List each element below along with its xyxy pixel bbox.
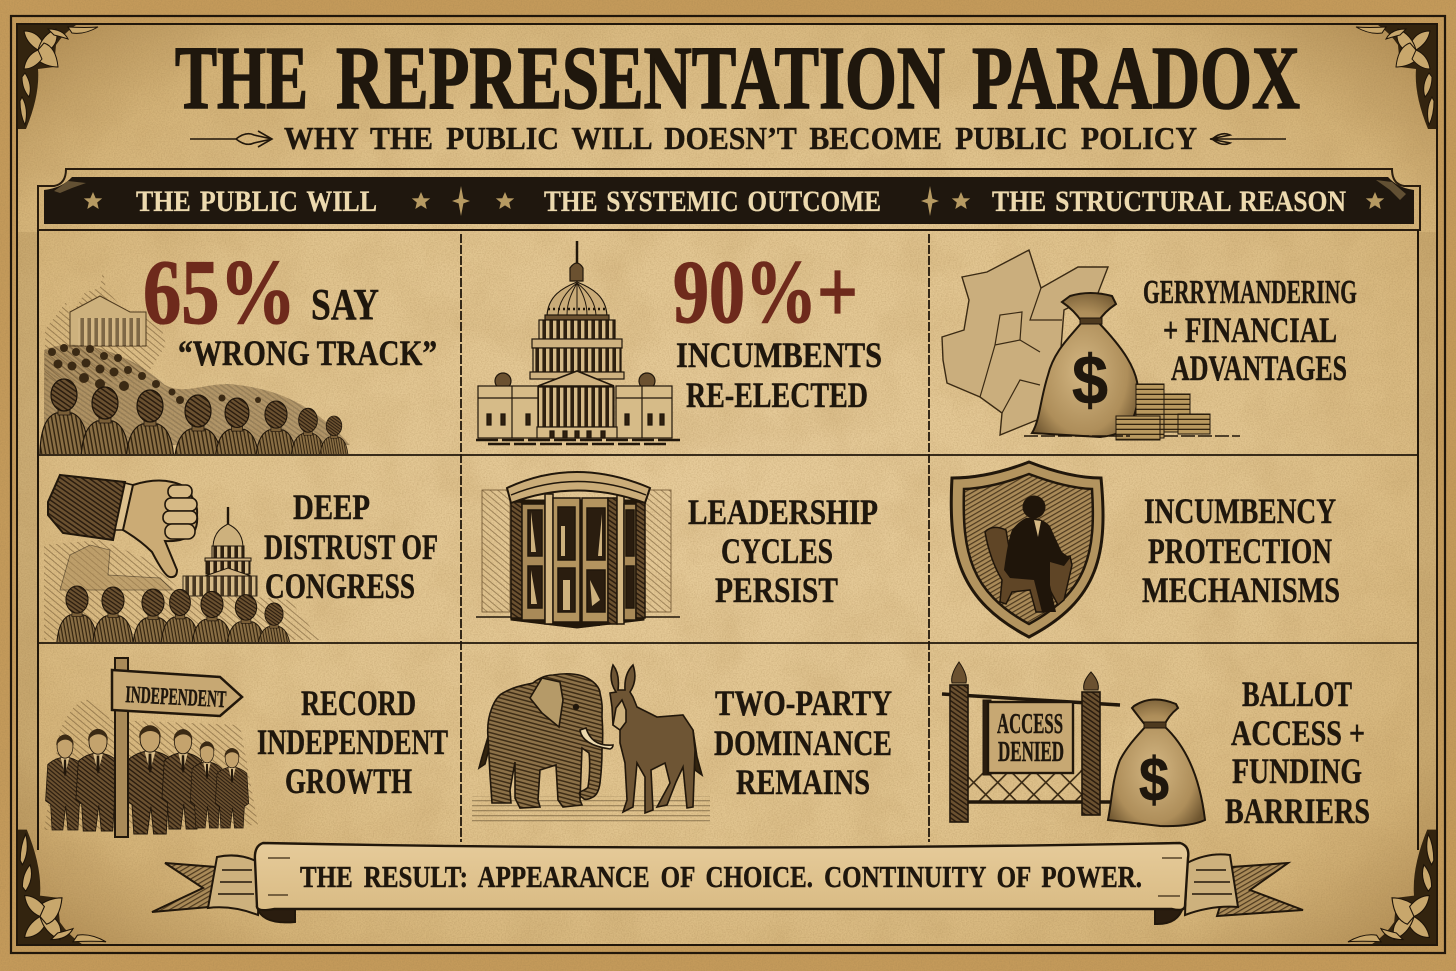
- label: two-party dominance remains: TWO-PARTY: [715, 683, 892, 723]
- label: deep distrust of congress: CONGRESS: [265, 566, 415, 606]
- label: incumbents re-elected: INCUMBENTS: [676, 335, 882, 375]
- label: wrong track: “WRONG TRACK”: [178, 333, 437, 373]
- result text: THE RESULT: APPEARANCE OF CHOICE. CONTINUITY OF POWER.: [300, 859, 1142, 894]
- label: record independent growth: [257, 683, 448, 801]
- illustration: crowd and building: [39, 275, 350, 454]
- label: deep distrust of congress: DISTRUST OF: [264, 527, 438, 567]
- illustration: independent signpost with people: [44, 658, 258, 837]
- label: ballot access + funding barriers: BARRIERS: [1225, 791, 1370, 831]
- sign text: [997, 709, 1064, 768]
- illustration: money bag: $: [1139, 746, 1169, 815]
- illustration: district map: [942, 250, 1108, 435]
- illustration: revolving door: [476, 472, 680, 628]
- illustration: money bag and coins: $: [1072, 341, 1108, 419]
- label: two-party dominance remains: REMAINS: [736, 762, 870, 802]
- label: gerrymandering + financial advantages: ADVANTAGES: [1171, 348, 1347, 388]
- illustration: capitol building: [476, 241, 680, 444]
- label: record independent growth: INDEPENDENT: [257, 722, 448, 762]
- panel: deep distrust of congress: [44, 475, 438, 661]
- label: ballot access + funding barriers: FUNDING: [1232, 751, 1362, 791]
- title: PARADOX: [972, 29, 1300, 128]
- door canopy: [507, 472, 650, 503]
- grid lines: [38, 230, 1418, 850]
- stat: 65%: 65%: [143, 241, 296, 343]
- label: ballot access + funding barriers: BALLOT: [1242, 674, 1352, 714]
- label: incumbents re-elected: RE-ELECTED: [686, 375, 868, 415]
- label: leadership cycles persist: PERSIST: [715, 570, 838, 610]
- label: ballot access + funding barriers: [1225, 674, 1370, 831]
- label: deep distrust of congress: DEEP: [293, 487, 370, 527]
- illustration: money bag: [1108, 699, 1205, 826]
- panel: 65% say wrong track: [39, 260, 436, 454]
- stat: 90%+: 90%+: [673, 243, 858, 342]
- label: deep distrust of congress: [264, 487, 438, 606]
- title: THE: [175, 29, 308, 128]
- distant crowd heads: [48, 344, 261, 404]
- label: incumbency protection mechanisms: INCUMBENCY: [1144, 491, 1336, 531]
- ribbon tails: [152, 854, 1303, 924]
- panel: record independent growth: [44, 658, 448, 837]
- sign text: ACCESS: [997, 709, 1063, 740]
- glass highlights: [531, 512, 602, 610]
- panel: incumbency protection: [951, 462, 1340, 637]
- figures: crowd: [56, 586, 290, 642]
- panel: gerrymandering and financial advantages: [942, 250, 1357, 440]
- panel: leadership cycles persist: [476, 472, 878, 628]
- panel: 90%+ incumbents re-elected: [476, 241, 882, 444]
- label: incumbency protection mechanisms: [1142, 491, 1340, 610]
- title: REPRESENTATION: [336, 29, 945, 128]
- illustration: shield with seated figure: [951, 462, 1103, 637]
- capitol wings: [478, 373, 672, 438]
- panel: ballot access and funding barriers: [942, 662, 1370, 831]
- illustration: money bag and coins: [1024, 293, 1240, 440]
- label: ballot access + funding barriers: ACCESS +: [1231, 713, 1365, 753]
- result ribbon banner: [152, 843, 1303, 924]
- label: gerrymandering + financial advantages: [1143, 274, 1357, 388]
- header band: [38, 169, 1420, 230]
- label: leadership cycles persist: LEADERSHIP: [688, 492, 878, 532]
- sleeve: [48, 475, 125, 540]
- label: record independent growth: GROWTH: [285, 761, 412, 801]
- seated figure in chair: [985, 496, 1072, 612]
- fist: [123, 481, 197, 577]
- door side panels: [511, 494, 645, 624]
- illustration: thumbs down over capitol and crowd: [44, 475, 320, 661]
- small capitol: [183, 507, 257, 596]
- label: say: SAY: [311, 280, 379, 329]
- figures: front row crowd: [39, 378, 348, 454]
- ground under animals: [472, 796, 710, 822]
- panel: two-party dominance: [472, 665, 892, 822]
- label: leadership cycles persist: [688, 492, 878, 610]
- label: two-party dominance remains: [714, 683, 892, 802]
- header: the systemic outcome: THE SYSTEMIC OUTCOME: [544, 185, 881, 218]
- label: record independent growth: RECORD: [301, 683, 416, 723]
- label: incumbency protection mechanisms: PROTECTION: [1148, 531, 1332, 571]
- sign text: DENIED: [998, 737, 1064, 768]
- label: incumbents re-elected: [676, 335, 882, 415]
- label: two-party dominance remains: DOMINANCE: [714, 723, 892, 763]
- label: incumbency protection mechanisms: MECHANISMS: [1142, 570, 1340, 610]
- illustration: donkey: [610, 665, 702, 813]
- illustration: elephant: [479, 674, 613, 808]
- label: leadership cycles persist: CYCLES: [721, 531, 833, 571]
- label: gerrymandering + financial advantages: + FINANCIAL: [1163, 310, 1337, 350]
- header: the public will: THE PUBLIC WILL: [136, 185, 377, 218]
- ribbon body: [255, 843, 1188, 910]
- sign text: INDEPENDENT: [125, 682, 227, 713]
- subtitle with flourishes: WHY THE PUBLIC WILL DOESN’T BECOME PUBLIC POLICY: [284, 120, 1197, 156]
- header: the structural reason: THE STRUCTURAL REASON: [992, 185, 1346, 218]
- illustration: fence with access denied sign: [942, 662, 1120, 822]
